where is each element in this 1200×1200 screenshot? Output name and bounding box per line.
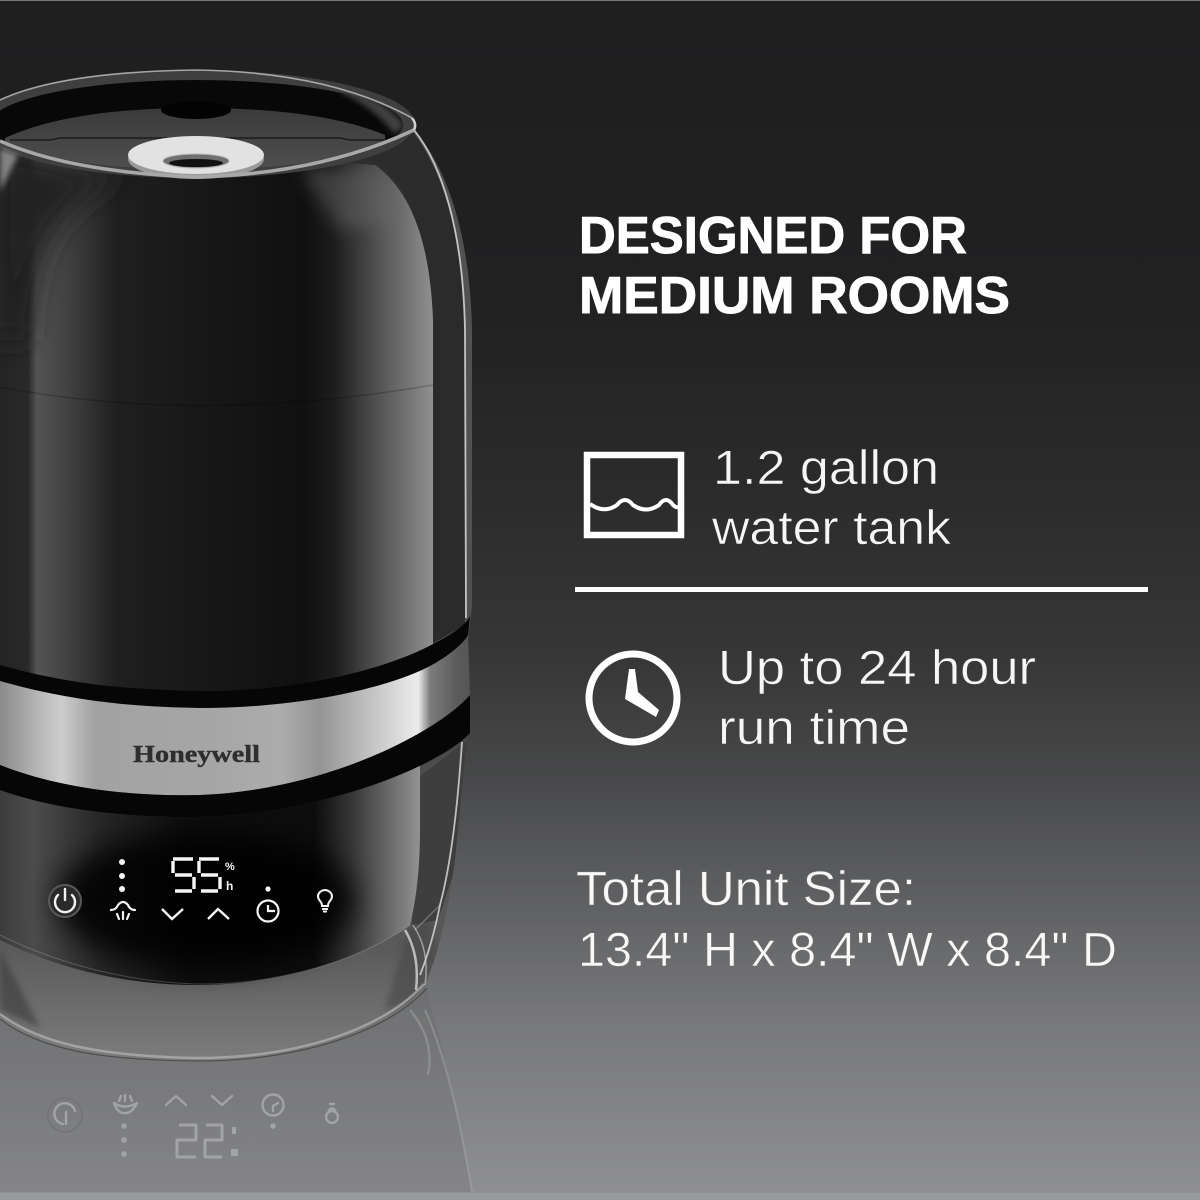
top rim and inner lid — [0, 70, 415, 192]
clear base — [0, 738, 470, 1061]
control panel — [49, 859, 332, 922]
text: run time: Up to 24 hour — [718, 642, 1036, 695]
mist level dots — [119, 859, 125, 892]
text: water tank capacity: water tank — [711, 502, 952, 555]
rim highlights — [0, 70, 412, 118]
inner black well — [0, 80, 403, 170]
down chevron — [162, 909, 183, 919]
text: total unit size — [576, 863, 1117, 977]
outer clear shell — [0, 128, 472, 720]
percent mark: % — [225, 861, 235, 873]
lower black body — [0, 765, 420, 985]
heading: MEDIUM ROOMS — [579, 267, 1010, 325]
humidifier product illustration — [0, 70, 472, 1192]
digital readout 55 — [173, 859, 220, 891]
text: water tank capacity: 1.2 gallon — [713, 442, 939, 495]
reflected digits 22 — [177, 1125, 222, 1157]
inner tank surface with highlights — [0, 160, 433, 720]
shoulder light — [300, 170, 405, 230]
top-left shading over highlight — [0, 145, 125, 340]
heading: DESIGNED FOR — [579, 207, 967, 265]
bulb icon — [318, 890, 332, 912]
black ring above band — [0, 616, 470, 708]
text: total unit size: Total Unit Size: — [576, 863, 916, 916]
timer dot — [265, 886, 271, 892]
black ring below band — [0, 695, 470, 817]
inner floor — [5, 93, 403, 168]
up chevron — [208, 909, 229, 919]
text: run time — [718, 642, 1036, 755]
control panel dark area — [55, 832, 355, 968]
heading — [579, 207, 1010, 325]
water line — [0, 385, 433, 406]
reflection of humidifier on the surface — [0, 985, 472, 1192]
shell edge light line — [414, 130, 466, 618]
divider — [575, 587, 1148, 592]
shell inner tone — [0, 128, 465, 720]
chrome mist nozzle — [128, 136, 264, 179]
reflected control panel — [48, 1094, 338, 1157]
icon: clock — [589, 654, 677, 742]
translucent rim body — [0, 70, 415, 178]
icon: water tank — [587, 455, 681, 535]
rear opening — [161, 101, 231, 119]
power button — [49, 885, 81, 917]
text: run time: run time — [718, 702, 910, 755]
mist icon — [111, 902, 135, 919]
bottom edge strip — [0, 1193, 1200, 1200]
stainless steel band — [0, 635, 470, 795]
text: water tank capacity — [711, 442, 952, 555]
timer icon — [258, 900, 278, 922]
text: total unit size: 13.4" H x 8.4" W x 8.4" D — [578, 924, 1117, 977]
clear shell light lines — [0, 742, 462, 990]
brand name: Honeywell — [133, 742, 260, 768]
hour mark: h — [226, 879, 233, 893]
